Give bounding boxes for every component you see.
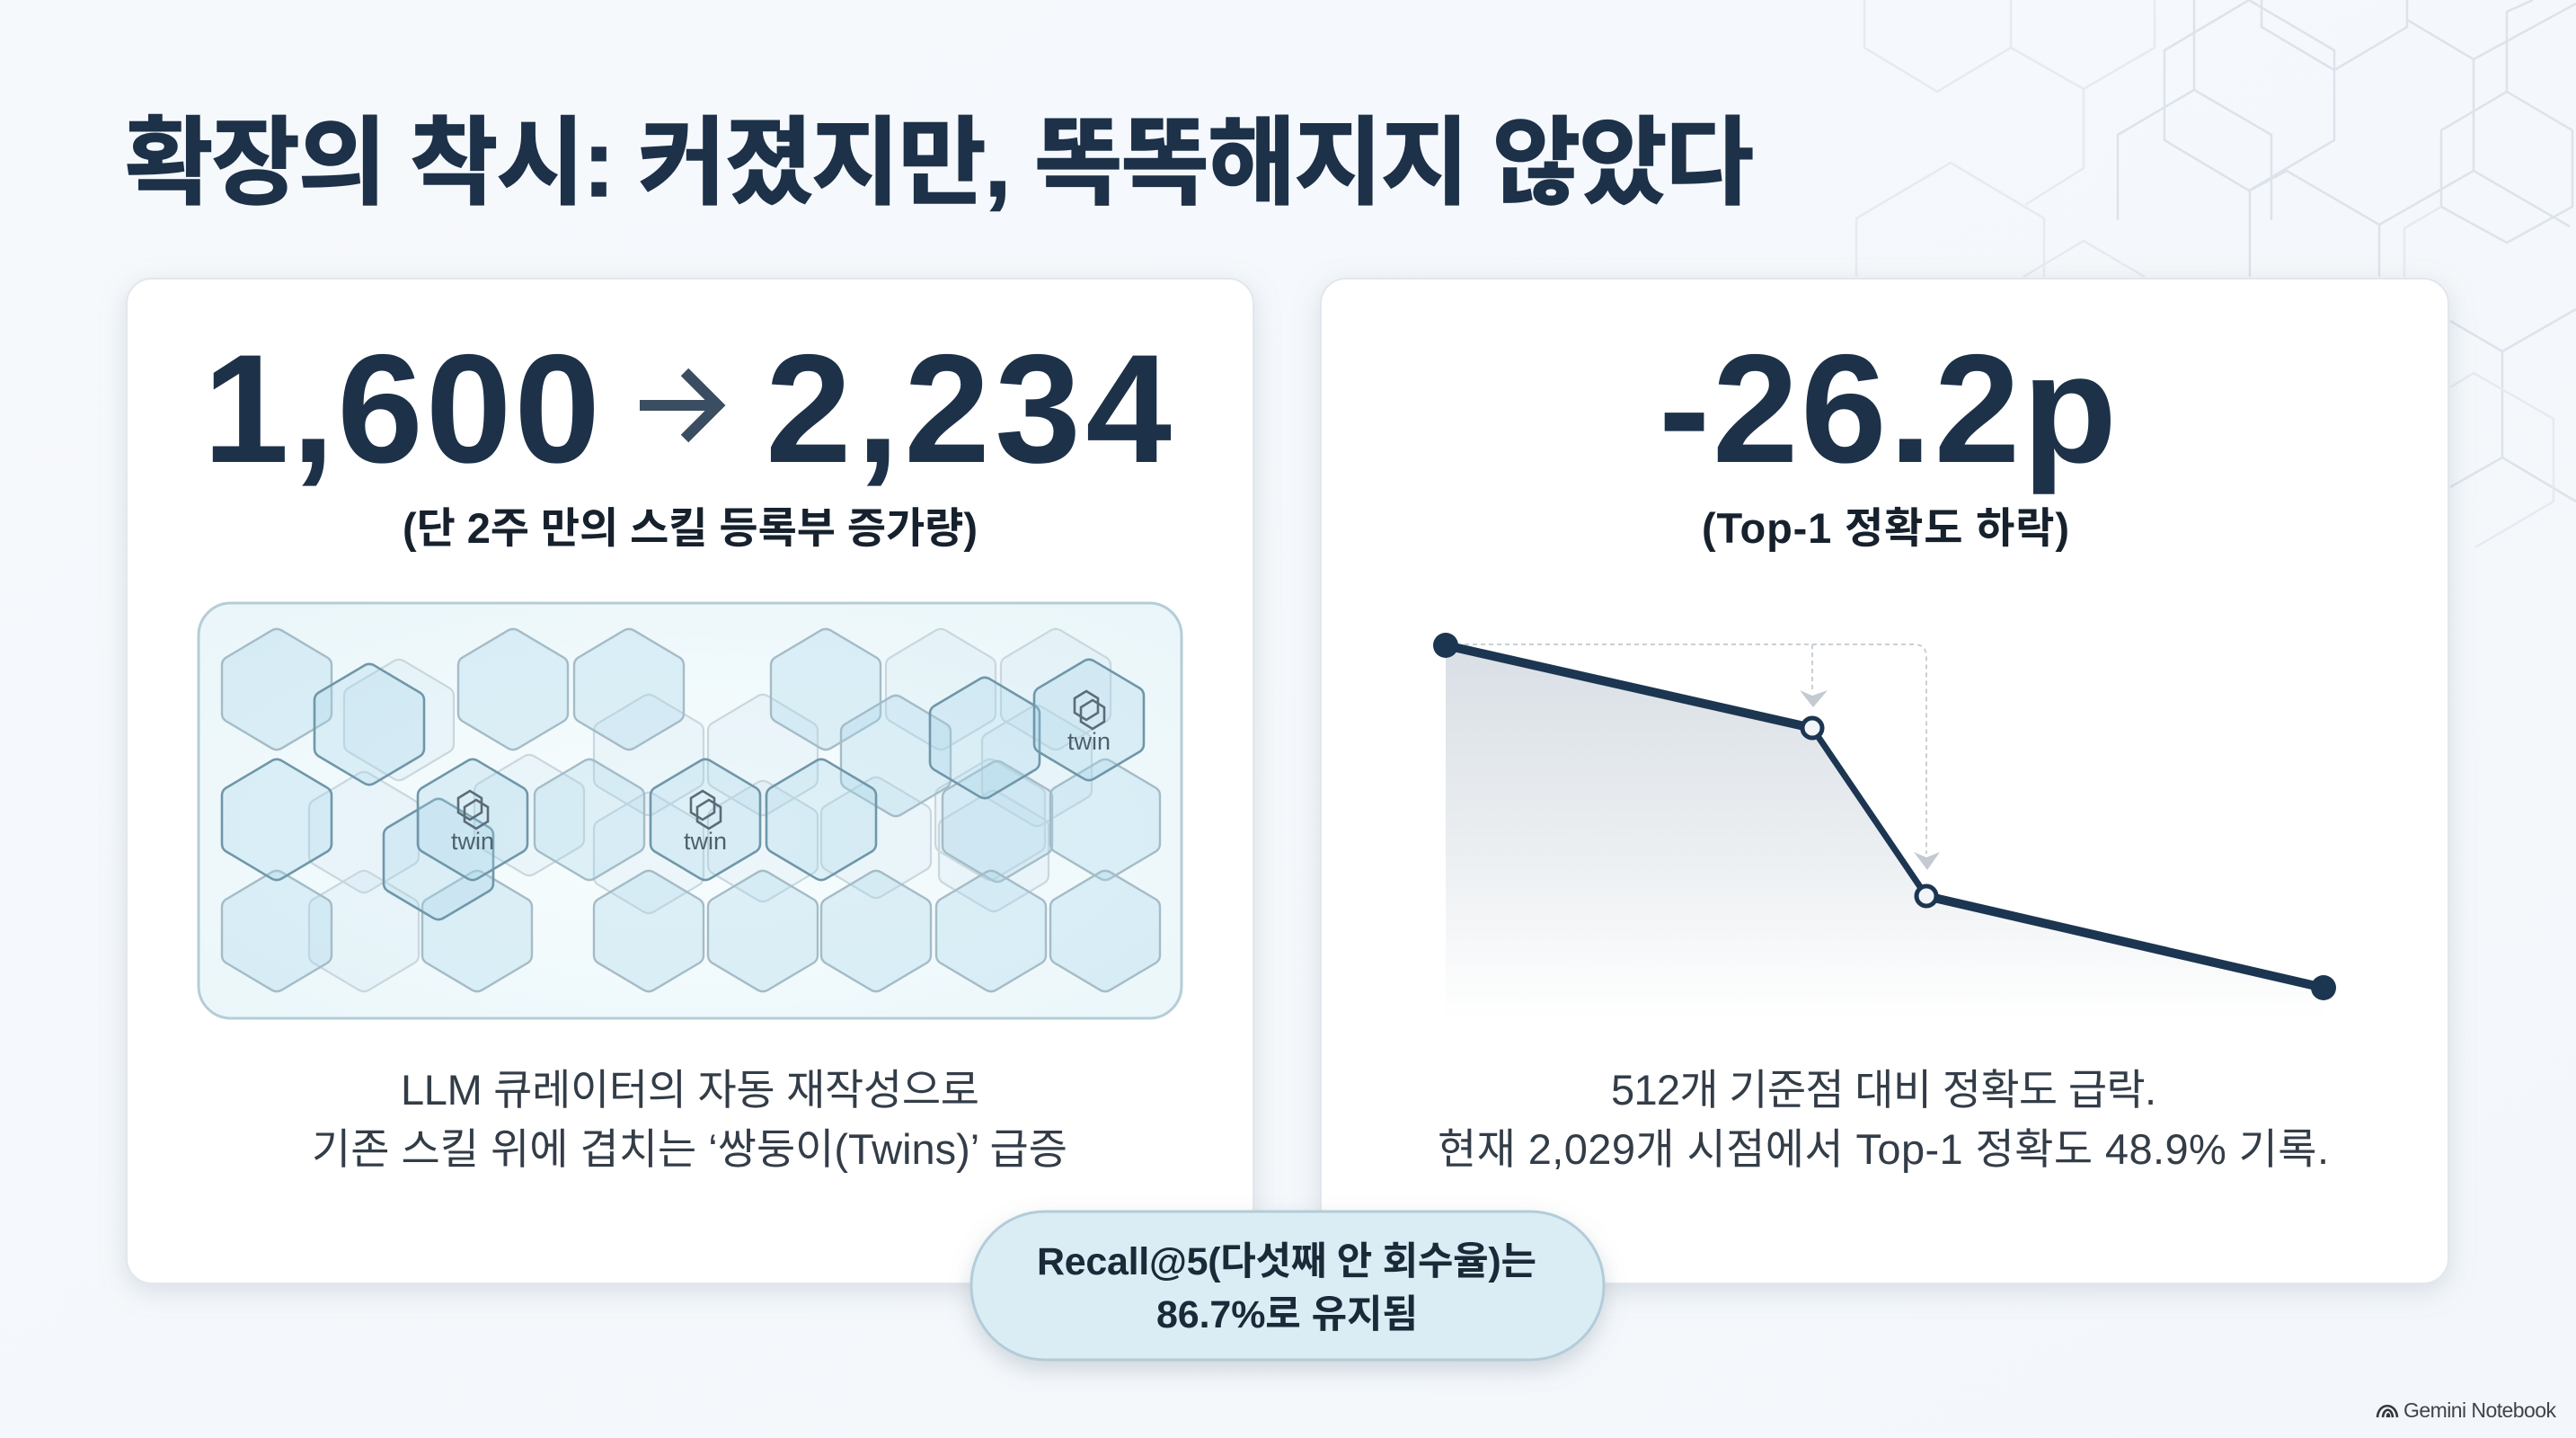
background hexagon pattern bbox=[1856, 0, 2576, 547]
grid panel bbox=[199, 603, 1182, 1018]
start point bbox=[1433, 633, 1458, 658]
watermark bbox=[2377, 1398, 2557, 1422]
description left bbox=[312, 1066, 1067, 1173]
description left: LLM 큐레이터의 자동 재작성으로 bbox=[401, 1066, 979, 1114]
description left: 기존 스킬 위에 겹치는 ‘쌍둥이(Twins)’ 급증 bbox=[312, 1125, 1067, 1173]
callout: recall bbox=[971, 1212, 1604, 1360]
hexagon skill grid bbox=[199, 603, 1182, 1018]
marker 2 bbox=[1917, 886, 1936, 906]
title: 확장의 착시: 커졌지만, 똑똑해지지 않았다 bbox=[125, 109, 1754, 217]
twin hexagon 2: twin bbox=[684, 828, 727, 855]
twin hexagon 3 bbox=[1034, 660, 1144, 780]
description right: 현재 2,029개 시점에서 Top-1 정확도 48.9% 기록. bbox=[1438, 1125, 2329, 1173]
area under line bbox=[1446, 645, 2324, 1020]
overlapping hexagons bbox=[222, 629, 1160, 991]
icon: arrow right bbox=[640, 372, 718, 439]
twin hexagon 1: twin bbox=[451, 828, 494, 855]
data line bbox=[1446, 645, 1812, 728]
callout: recall: 86.7%로 유지됨 bbox=[1156, 1293, 1418, 1336]
panel background right bbox=[1321, 279, 2448, 1283]
arrowhead 1 bbox=[1800, 690, 1828, 707]
description right bbox=[1438, 1066, 2329, 1173]
line chart bbox=[1433, 633, 2336, 1020]
callout text: Recall@5(다섯째 안 회수율)는 bbox=[1037, 1240, 1536, 1283]
subheading right: (Top-1 정확도 하락) bbox=[1702, 504, 2069, 552]
panel: skill registry growth bbox=[127, 279, 1253, 1283]
twin hexagon 3: twin bbox=[1067, 728, 1111, 755]
big number: 1,600: 1,600 bbox=[203, 323, 600, 495]
data line final segment bbox=[1926, 896, 2324, 988]
panel: accuracy drop bbox=[1321, 279, 2448, 1283]
twin hexagon 2 bbox=[651, 759, 760, 880]
marker 1 bbox=[1802, 718, 1822, 738]
end point bbox=[2311, 975, 2336, 1000]
data line steep segment bbox=[1812, 728, 1926, 896]
description right: 512개 기준점 대비 정확도 급락. bbox=[1611, 1066, 2156, 1114]
arrowhead 2 bbox=[1914, 852, 1940, 870]
big number: 2,234: 2,234 bbox=[766, 323, 1172, 495]
twin hexagon 1 bbox=[418, 759, 527, 880]
callout pill bbox=[971, 1212, 1604, 1360]
dashed guides bbox=[1465, 644, 1926, 854]
subheading left: (단 2주 만의 스킬 등록부 증가량) bbox=[403, 504, 978, 552]
watermark text: Gemini Notebook bbox=[2403, 1398, 2557, 1422]
big number: -26.2p: -26.2p bbox=[1659, 323, 2117, 495]
icon: notebook arcs bbox=[2377, 1406, 2397, 1417]
panel background left bbox=[127, 279, 1253, 1283]
